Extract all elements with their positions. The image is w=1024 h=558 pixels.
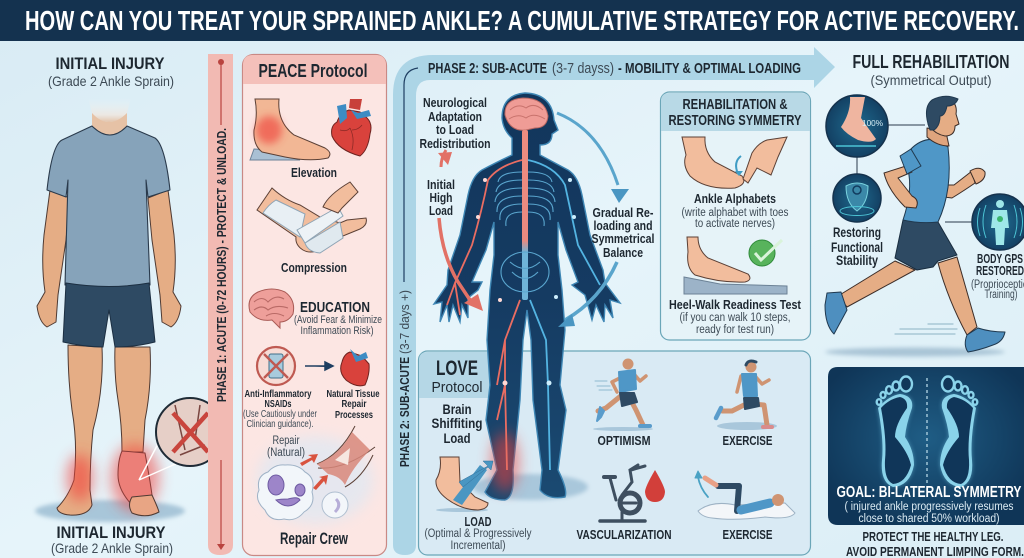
icon: foot 100 percent circle <box>826 95 888 157</box>
phase 1 timeline bar: PHASE 1: ACUTE (0-72 HOURS) - PROTECT & UNLOAD. <box>214 128 229 402</box>
icon: elevated foot <box>250 99 330 160</box>
icon: shield stability circle <box>833 174 881 222</box>
label: ankle alphabets: Ankle Alphabets <box>694 191 776 206</box>
goal text <box>836 484 1022 525</box>
phase 2 arrow band: PHASE 2: SUB-ACUTE <box>397 357 412 467</box>
label: gradual reloading: Symmetrical <box>592 231 654 246</box>
label: neurological adaptation: to Load <box>436 122 474 137</box>
rehab header: RESTORING SYMMETRY <box>668 113 802 129</box>
phase 2 arrow band: (3-7 days +) <box>397 290 412 354</box>
education text <box>294 299 382 337</box>
repair label: (Natural) <box>267 447 305 459</box>
arrow: initial high load to neurological <box>438 150 483 311</box>
label: heel walk readiness test: ready for test run) <box>696 324 774 336</box>
label: repair crew: Repair Crew <box>280 529 349 548</box>
forward arm <box>944 171 975 198</box>
nerves <box>447 160 522 470</box>
panel: PEACE protocol <box>242 54 386 556</box>
label: load <box>424 514 532 552</box>
shorts <box>895 220 957 270</box>
label: initial high load <box>427 177 455 218</box>
rehab header: REHABILITATION & <box>682 97 788 113</box>
icon: leg raise on pillow <box>695 471 795 519</box>
label: brain shifting load: Brain <box>442 401 472 417</box>
icon: foot 100 percent circle: 100% <box>862 119 883 128</box>
arrow: gradual reloading to leg <box>558 262 617 327</box>
label: brain shifting load: Shiffiting <box>432 415 482 431</box>
back arm <box>884 166 917 208</box>
heading: initial injury top <box>48 54 174 89</box>
natural tissue label: Processes <box>335 409 373 421</box>
rehab header <box>661 93 810 131</box>
panel: LOVE protocol background <box>418 351 810 555</box>
brain <box>505 98 548 130</box>
label: gradual reloading: loading and <box>594 218 653 233</box>
full rehabilitation connectors <box>857 125 973 222</box>
label: restoring functional stability <box>831 225 883 268</box>
label: heel walk readiness test <box>669 297 802 336</box>
heading: full rehabilitation <box>852 52 1010 88</box>
label: brain shifting load: Load <box>444 430 470 446</box>
torso <box>903 139 949 223</box>
panel: rehabilitation and restoring symmetry <box>660 92 810 340</box>
heading: initial injury bottom: (Grade 2 Ankle Sprain) <box>51 540 173 556</box>
heading: full rehabilitation: (Symmetrical Output) <box>870 72 992 88</box>
icon: brain <box>249 289 294 328</box>
repair label <box>267 435 305 459</box>
label: ankle alphabets: to activate nerves) <box>695 218 775 230</box>
NSAIDs label: NSAIDs <box>264 398 292 410</box>
education text: EDUCATION <box>300 299 370 316</box>
label: body gps restored <box>971 252 1024 301</box>
left footprint <box>877 376 914 487</box>
label: initial high load: High <box>430 190 453 205</box>
injured man figure <box>35 98 185 522</box>
icon: heart small <box>341 349 369 386</box>
natural tissue label <box>326 388 380 421</box>
goal text: close to shared 50% workload) <box>858 513 1000 525</box>
icon: lunge exercise <box>716 361 777 430</box>
icon: green check <box>749 240 782 266</box>
front leg <box>938 257 977 335</box>
icon: ankle alphabets <box>682 137 787 188</box>
icon: repair crew cells and tissue <box>257 426 375 524</box>
label: initial high load: Initial <box>427 177 455 192</box>
label: gradual reloading <box>592 205 654 260</box>
spine <box>522 130 528 300</box>
ribs <box>495 172 555 292</box>
education text: Inflammation Risk) <box>300 325 374 337</box>
icon: loaded foot with arrow <box>436 457 493 512</box>
label: neurological adaptation: Neurological <box>423 95 487 110</box>
label: exercise leg raise: EXERCISE <box>722 527 773 542</box>
icon: compression bandage <box>257 182 366 253</box>
phase 2 arrow band <box>393 47 835 555</box>
icon: blood drop <box>645 470 665 502</box>
label: compression: Compression <box>281 260 347 275</box>
label: brain shifting load <box>432 401 482 446</box>
label: vascularization: VASCULARIZATION <box>576 527 672 542</box>
heading: initial injury top: (Grade 2 Ankle Sprain) <box>48 73 174 89</box>
natural tissue label: Natural Tissue <box>326 388 380 400</box>
icon: runner optimism <box>593 358 653 431</box>
icon: heel walk on wedge <box>684 237 787 294</box>
heading: initial injury top: INITIAL INJURY <box>56 54 165 73</box>
phase 2 arrow band: (3-7 dayss) <box>552 60 614 77</box>
NSAIDs label: Anti-Inflammatory <box>244 388 312 400</box>
head <box>927 128 949 146</box>
label: ankle alphabets <box>682 191 789 230</box>
phase 2 arrow band: PHASE 2: SUB-ACUTE <box>428 60 547 77</box>
label: gradual reloading: Gradual Re- <box>592 205 654 220</box>
label: restoring functional stability: Functional <box>831 240 883 255</box>
heading: initial injury bottom: INITIAL INJURY <box>56 523 166 542</box>
label: exercise lunge: EXERCISE <box>722 433 773 448</box>
phase 2 arrow band: - MOBILITY & OPTIMAL LOADING <box>618 60 801 77</box>
label: restoring functional stability: Stability <box>836 253 878 268</box>
label: elevation: Elevation <box>291 165 337 180</box>
panel: goal bilateral symmetry <box>828 367 1024 525</box>
back leg <box>838 261 915 307</box>
label: heel walk readiness test: Heel-Walk Readiness Test <box>669 297 802 312</box>
label: load: (Optimal & Progressively <box>424 528 532 540</box>
label: load: Incremental) <box>450 540 506 552</box>
PEACE header <box>243 55 386 84</box>
label: neurological adaptation <box>420 95 491 151</box>
icon: exercise bike <box>600 465 645 521</box>
NSAIDs label: Clinician guidance). <box>246 419 314 430</box>
label: restoring functional stability: Restoring <box>833 225 881 240</box>
PEACE header: PEACE Protocol <box>258 61 368 81</box>
icon: no NSAIDs <box>257 347 295 385</box>
NSAIDs label <box>243 388 317 430</box>
heading: initial injury bottom <box>51 523 173 556</box>
label: initial high load: Load <box>429 203 453 218</box>
label: gradual reloading: Balance <box>603 245 643 260</box>
label: neurological adaptation: Adaptation <box>428 109 482 124</box>
right footprint <box>940 376 977 487</box>
label: ankle alphabets: (write alphabet with toes <box>682 207 789 219</box>
panel: LOVE protocol background: Protocol <box>432 379 482 396</box>
icon: body gps circle <box>972 194 1024 250</box>
panel: LOVE protocol background: LOVE <box>436 357 478 380</box>
repair label: Repair <box>272 435 300 447</box>
label: optimism: OPTIMISM <box>598 433 650 448</box>
icon: heart <box>332 99 371 156</box>
nervous system body figure <box>434 93 620 500</box>
arrow to repair <box>305 362 333 370</box>
label: heel walk readiness test: (if you can walk 10 steps, <box>680 312 790 324</box>
label: neurological adaptation: Redistribution <box>420 136 491 151</box>
icon: symmetrical footprints <box>877 376 977 487</box>
label: load: LOAD <box>464 514 492 529</box>
callout: ligament tear magnifier <box>139 398 224 480</box>
phase 1 timeline bar <box>208 54 233 555</box>
natural tissue label: Repair <box>342 398 366 410</box>
education text: (Avoid Fear & Minimize <box>294 314 382 326</box>
NSAIDs label: (Use Cautiously under <box>243 409 317 420</box>
arrow: brain to gradual reloading <box>557 113 629 203</box>
footer advice text <box>846 529 1024 558</box>
full rehabilitation runner <box>825 96 1005 356</box>
